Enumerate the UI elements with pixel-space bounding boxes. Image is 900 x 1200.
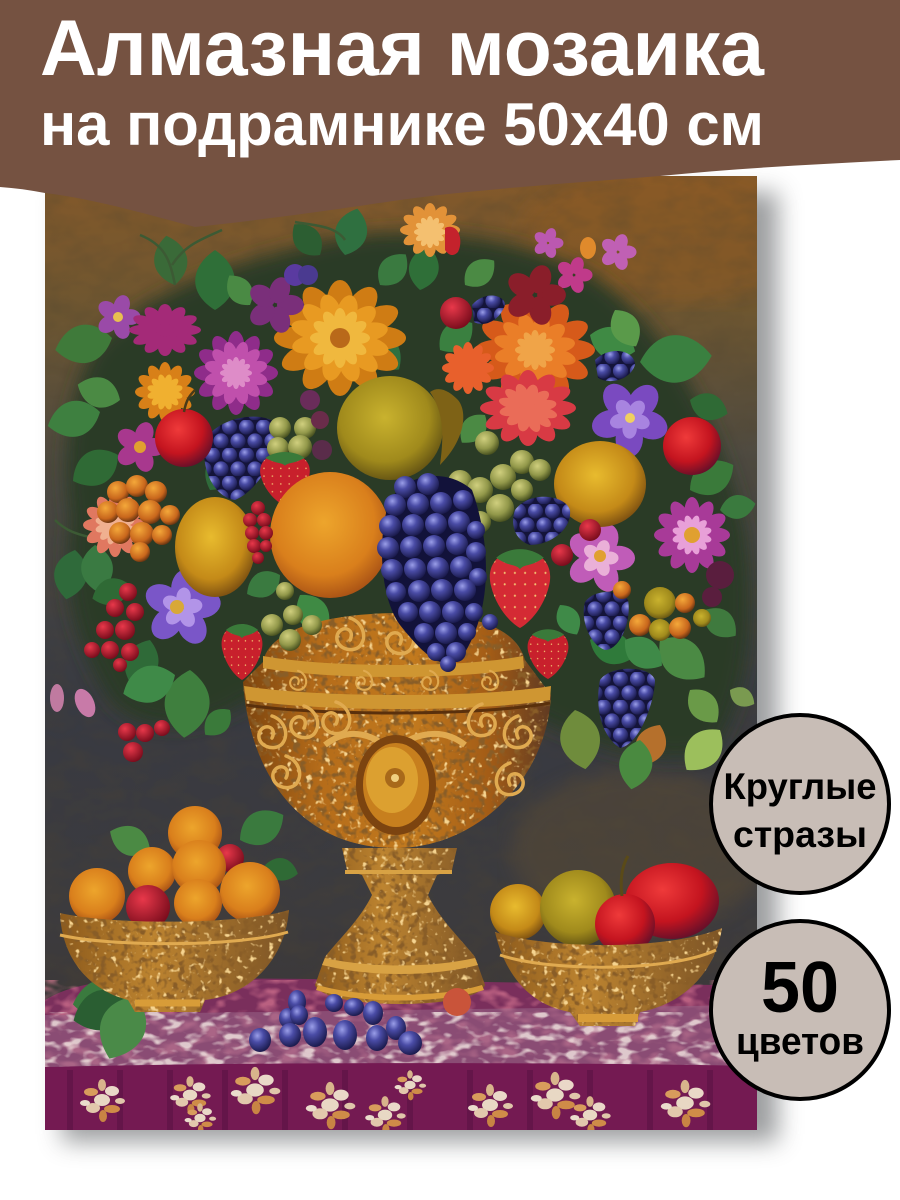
bowl right: golden vessel	[493, 926, 725, 1028]
flower: orange chrysanthemum	[274, 280, 406, 396]
tablecloth leaf	[67, 974, 157, 1067]
grapes: blue cluster upper left	[204, 417, 278, 500]
orange apple: left	[175, 497, 255, 597]
bowl left: oranges and cherries	[69, 801, 301, 929]
apple: red left	[155, 390, 213, 467]
flower: coral gerbera left	[83, 493, 147, 557]
leaves	[43, 205, 759, 792]
strawberry: upper left	[260, 452, 310, 506]
grapes: large blue bunch over the vase	[377, 473, 498, 672]
strawberry: large center right	[490, 549, 550, 628]
small fruit on the table	[443, 988, 471, 1016]
red berries lower left	[84, 583, 170, 762]
vase: ornate golden bowl	[240, 605, 560, 855]
apple: red right	[663, 417, 721, 475]
pink buds far left	[50, 684, 96, 718]
grapes: blue bunch hanging right	[598, 669, 655, 748]
painted wall background	[45, 176, 757, 1000]
flower: violet pansy left	[146, 571, 221, 644]
stems upper left	[55, 222, 345, 540]
canvas shadow	[62, 192, 778, 1142]
bowl left: golden vessel	[58, 908, 292, 1014]
top banner	[0, 0, 900, 227]
flowers: small purple blossoms	[95, 227, 637, 474]
red currants by the apple	[243, 501, 273, 564]
fruit: yellow apple right	[554, 441, 646, 527]
grapes: blue bunch lower right	[584, 592, 629, 650]
grapes: green under the apple	[261, 582, 322, 651]
grapes: green upper left	[267, 390, 332, 460]
orange apple: center	[270, 472, 390, 598]
grapes: blue bunch right of center	[513, 497, 570, 545]
flower: orange daisy left	[135, 362, 195, 422]
foliage mass	[66, 232, 750, 758]
badge: round rhinestones: стразы	[733, 814, 867, 855]
vase: pedestal stem and base	[312, 848, 488, 1006]
badge: 50 colours	[711, 921, 889, 1099]
bowl right: apples and cherry	[490, 856, 719, 954]
flower: violet iris right	[592, 384, 668, 456]
badge: 50 colours: цветов	[736, 1021, 864, 1063]
title: Алмазная мозаика	[40, 3, 765, 92]
pear: large olive fruit	[337, 376, 463, 480]
grapes: green bunch center right	[448, 431, 551, 533]
badge: 50 colours: 50	[761, 948, 839, 1028]
table: patterned tablecloth	[45, 979, 757, 1135]
badge: round rhinestones: Круглые	[724, 766, 876, 807]
flower: magenta aster	[194, 331, 278, 415]
berries: dark blue top right	[440, 296, 635, 381]
flower: coral dahlias	[442, 298, 595, 446]
badge: round rhinestones	[711, 715, 889, 893]
orange berries cluster	[97, 475, 180, 562]
subtitle: на подрамнике 50х40 см	[40, 91, 764, 158]
strawberry: lower right	[528, 629, 568, 679]
strawberry: lower left	[222, 624, 262, 680]
flower: top orange bloom	[400, 203, 460, 257]
grapes on the table	[249, 990, 422, 1055]
fruits: golden berries right	[551, 519, 734, 641]
painting: fruit and flowers in a golden vase	[43, 165, 820, 1135]
flowers: pink blossoms right	[564, 497, 730, 595]
